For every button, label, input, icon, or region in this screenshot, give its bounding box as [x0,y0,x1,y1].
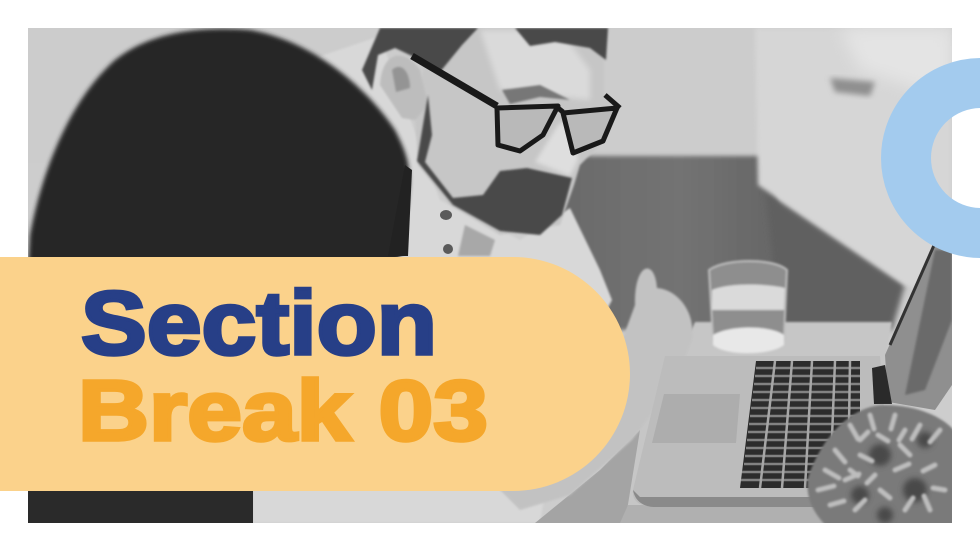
woman: lower body [28,491,253,523]
plant [807,405,960,530]
man: nose [535,118,578,176]
man: shirt buttons and placket [440,210,495,256]
keyboard [740,361,860,488]
screen [885,243,952,410]
water glass [709,261,787,353]
man: ear [380,56,428,120]
trackpad [652,394,740,443]
laptop [633,243,952,507]
man: hair [362,28,608,104]
man: shirt [253,36,612,523]
title: Section: Section [81,274,437,374]
title: Break 03: Break 03 [78,364,488,459]
man: face [416,137,590,235]
blue ring decoration [906,83,980,233]
man: beard [417,95,572,235]
man: glasses [412,56,620,153]
woman: glasses arm [396,165,412,256]
background: wall, floor and sofa [408,28,980,402]
table [692,320,893,334]
woman: hair [28,29,409,270]
yellow banner [0,257,630,491]
man: arm and hand [500,269,693,510]
